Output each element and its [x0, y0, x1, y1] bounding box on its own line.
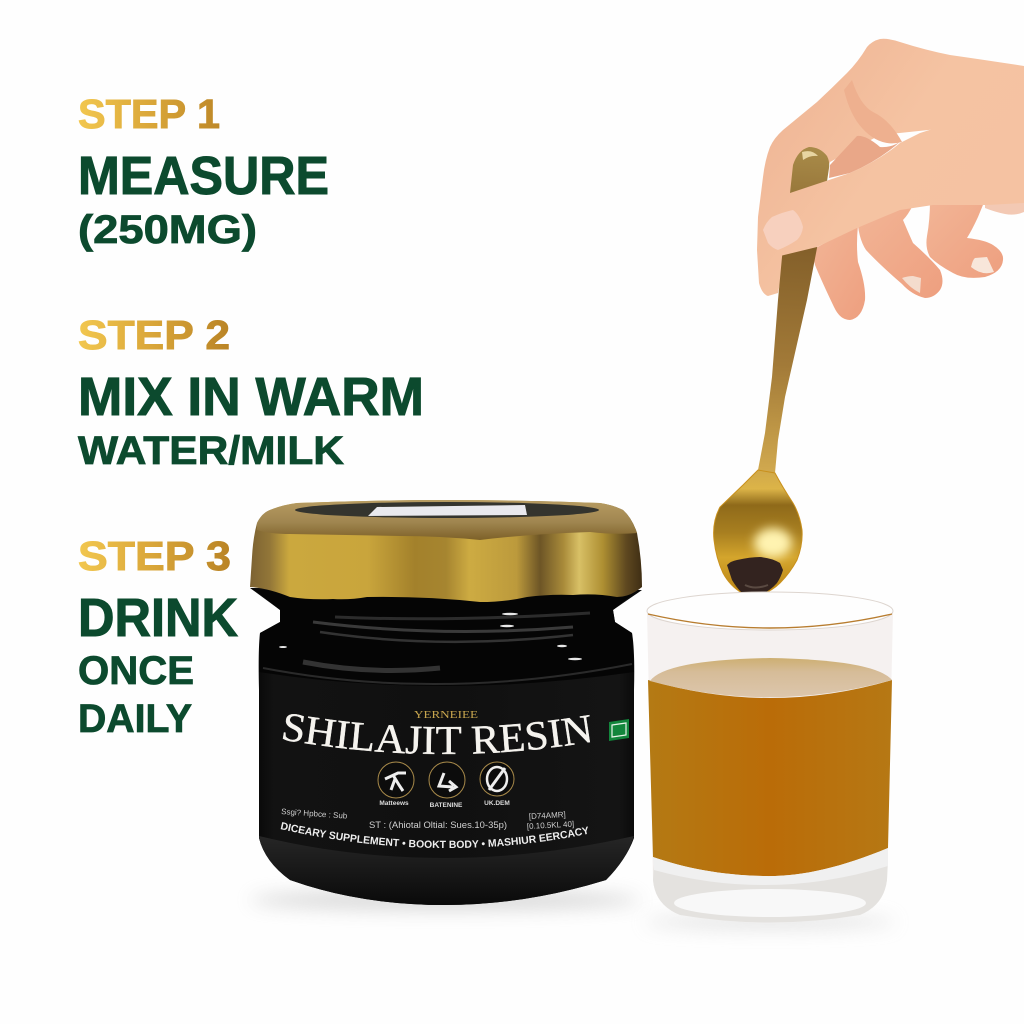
fourth finger	[926, 200, 1003, 278]
small print: ST : (Ahiotal Oltial: Sues.10-35p)	[369, 820, 507, 831]
step 3 text block: STEP 3	[78, 533, 231, 579]
step 3 text block	[78, 533, 238, 741]
lid shoulder	[257, 500, 637, 540]
step 3 text block: ONCE	[78, 649, 194, 693]
label icon 2: BATENINE	[430, 802, 463, 809]
step 2 text block: STEP 2	[78, 312, 230, 358]
step 1 text block: MEASURE	[78, 146, 329, 206]
white glass foot band	[653, 848, 888, 885]
step 3 text block: DAILY	[78, 697, 192, 741]
glass base	[653, 860, 888, 922]
small print: [D74AMR]	[529, 810, 566, 821]
brand name: YERNEIEE	[414, 710, 478, 721]
hand holding spoon handle	[757, 39, 1024, 473]
product jar: DICEARY SUPPLEMENT • BOOKT BODY • MASHIUR EERCACY	[280, 822, 588, 848]
step 3 text block: DRINK	[78, 588, 238, 648]
product name	[280, 739, 596, 754]
base highlight	[674, 889, 866, 917]
neck highlights	[279, 613, 582, 660]
thumb and palm	[758, 100, 1024, 256]
supplement line	[280, 829, 592, 848]
neck shadow	[255, 590, 638, 686]
neck ridges	[335, 613, 590, 619]
step 2 text block	[78, 312, 424, 473]
step 1 text block: (250MG)	[78, 208, 257, 252]
lid top white label	[368, 505, 527, 516]
jar body	[250, 588, 642, 905]
glass walls	[647, 611, 893, 922]
liquid surface	[650, 658, 892, 697]
step 2 text block: MIX IN WARM	[78, 367, 424, 427]
liquid body	[648, 680, 892, 876]
thumbnail	[763, 210, 803, 250]
glass of golden drink	[645, 592, 895, 929]
gold lid	[250, 500, 642, 602]
middle finger	[812, 225, 865, 320]
small print	[281, 807, 574, 831]
step 1 text block	[78, 91, 329, 252]
resin highlight	[745, 585, 768, 588]
label icon 2	[429, 762, 465, 809]
label icon 1	[378, 762, 414, 807]
small print: [0.10.5KL 40]	[527, 820, 574, 831]
product jar: SHILAJIT RESIN	[282, 714, 590, 754]
index finger and back of hand	[757, 39, 1024, 296]
green mark	[609, 719, 629, 741]
curled finger crease	[844, 80, 902, 143]
label icon 3: UK.DEM	[484, 800, 510, 807]
rim front amber line	[648, 614, 892, 628]
fourth fingernail	[971, 257, 994, 273]
product jar	[250, 500, 642, 917]
glass shadow	[645, 915, 895, 929]
spoon handle	[758, 147, 829, 473]
step 2 text block: WATER/MILK	[78, 429, 344, 473]
label icon 3	[480, 762, 514, 807]
small print: Ssgi? Hpbce : Sub	[281, 807, 348, 821]
label icon 1: Matteews	[379, 800, 409, 807]
resin lump	[727, 557, 783, 595]
jar base band	[259, 836, 634, 905]
step 1 text block: STEP 1	[78, 91, 220, 137]
ring fingernail	[902, 276, 921, 293]
spoon bowl with resin	[714, 470, 802, 595]
bowl highlight	[754, 528, 792, 558]
jar shadow	[250, 890, 640, 910]
glass rim	[647, 592, 893, 630]
palm shadow between index finger and thumb	[829, 136, 902, 178]
lid top inset	[295, 502, 599, 518]
little finger	[985, 200, 1024, 215]
ring finger	[857, 205, 942, 298]
handle shine	[802, 151, 818, 160]
